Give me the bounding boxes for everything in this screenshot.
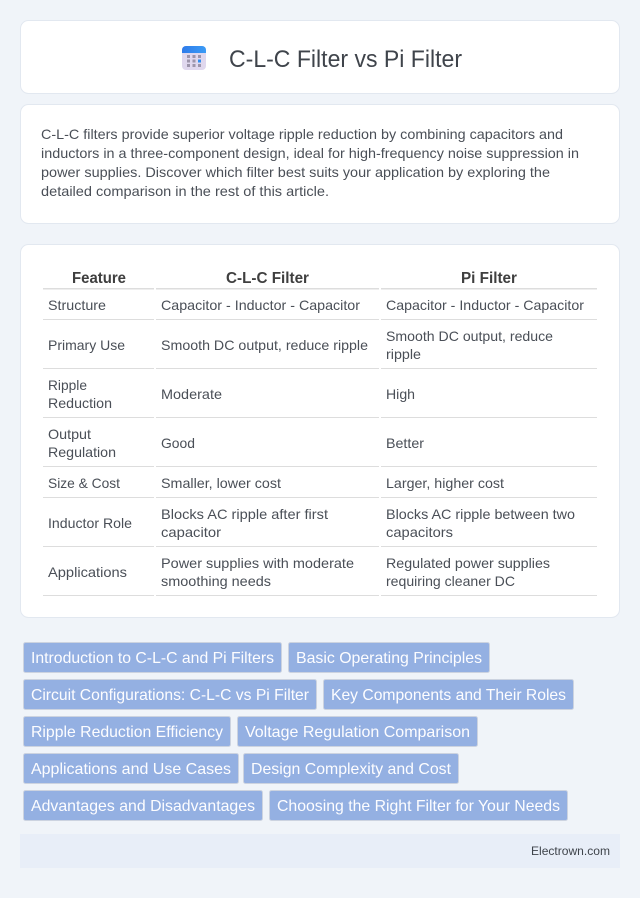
row: structure: Structure: [48, 297, 106, 313]
tag: circuit configurations: [24, 680, 316, 710]
tag: design complexity: Design Complexity and Cost: [251, 761, 452, 778]
row: inductor role: capacitors: [386, 524, 453, 540]
row: output regulation: Output: [48, 426, 91, 442]
row: inductor role: Blocks AC ripple after first: [161, 506, 328, 522]
row: applications: smoothing needs: [161, 573, 271, 589]
row: primary use: Smooth DC output, reduce ripple: [161, 337, 368, 353]
panel: topic tags: [24, 642, 574, 820]
panel: comparison table: [20, 244, 620, 618]
row: primary use: Primary Use: [48, 337, 125, 353]
tag: advantages: Advantages and Disadvantages: [31, 798, 255, 815]
tag: circuit configurations: Circuit Configurations: C-L-C vs Pi Filter: [31, 687, 310, 704]
row: applications: Regulated power supplies: [386, 555, 550, 571]
tag: key components: Key Components and Their Roles: [331, 687, 566, 704]
row: applications: requiring cleaner DC: [386, 573, 515, 589]
tag: voltage regulation: [238, 716, 478, 746]
row: primary use: ripple: [386, 346, 421, 362]
row: structure: [48, 297, 584, 313]
table header: [72, 270, 517, 287]
row: size and cost: Larger, higher cost: [386, 475, 504, 491]
row: primary use: Smooth DC output, reduce: [386, 328, 553, 344]
row: output regulation: Regulation: [48, 444, 116, 460]
tag: design complexity: [244, 754, 458, 784]
row: primary use: [48, 328, 553, 362]
table header: Pi Filter: [461, 270, 517, 287]
row: output regulation: Good: [161, 435, 195, 451]
panel: header: [20, 20, 620, 94]
row: size and cost: [48, 475, 504, 491]
tag: choosing filter: [270, 790, 568, 820]
table header: Feature: [72, 270, 126, 287]
intro text: C-L-C filters provide superior voltage ripple reduction by combining capacitors and: [41, 126, 563, 142]
intro text: detailed comparison in the rest of this article.: [41, 183, 329, 199]
row: output regulation: [48, 426, 424, 460]
tag: choosing filter: Choosing the Right Filter for Your Needs: [277, 798, 560, 815]
panel: introduction: [20, 104, 620, 224]
intro text: inductors in a three-component design, ideal for high-frequency noise suppression in: [41, 145, 579, 161]
title: C-L-C Filter vs Pi Filter: [229, 46, 462, 73]
intro text: [41, 126, 579, 199]
row: size and cost: Smaller, lower cost: [161, 475, 281, 491]
tag: voltage regulation: Voltage Regulation Comparison: [245, 724, 470, 741]
table header: C-L-C Filter: [226, 270, 309, 287]
row: inductor role: [48, 506, 575, 540]
row: applications: Applications: [48, 564, 127, 580]
row: inductor role: capacitor: [161, 524, 221, 540]
row: ripple reduction: High: [386, 386, 415, 402]
tag: applications: Applications and Use Cases: [31, 761, 231, 778]
tag: principles: [288, 642, 490, 672]
row: inductor role: Inductor Role: [48, 515, 132, 531]
row: ripple reduction: Reduction: [48, 395, 112, 411]
tag: ripple efficiency: [24, 716, 230, 746]
icon: calendar: [182, 46, 206, 70]
footer: Electrown.com: [531, 844, 610, 858]
intro text: power supplies. Discover which filter best suits your application by exploring the: [41, 164, 550, 180]
row: applications: Power supplies with moderate: [161, 555, 354, 571]
tag: introduction: [24, 642, 282, 672]
row: size and cost: Size & Cost: [48, 475, 120, 491]
tag: applications: [24, 754, 238, 784]
tag: key components: [324, 680, 574, 710]
footer: [20, 834, 620, 868]
row: ripple reduction: Ripple: [48, 377, 87, 393]
row: applications: [48, 555, 550, 589]
tag: introduction: Introduction to C-L-C and Pi Filters: [31, 650, 274, 667]
row: output regulation: Better: [386, 435, 424, 451]
row: structure: Capacitor - Inductor - Capacitor: [386, 297, 584, 313]
row: structure: Capacitor - Inductor - Capacitor: [161, 297, 360, 313]
row: ripple reduction: Moderate: [161, 386, 222, 402]
tag: ripple efficiency: Ripple Reduction Efficiency: [31, 724, 223, 741]
row: ripple reduction: [48, 377, 415, 411]
row: inductor role: Blocks AC ripple between two: [386, 506, 575, 522]
tag: advantages: [24, 790, 262, 820]
tag: principles: Basic Operating Principles: [296, 650, 482, 667]
